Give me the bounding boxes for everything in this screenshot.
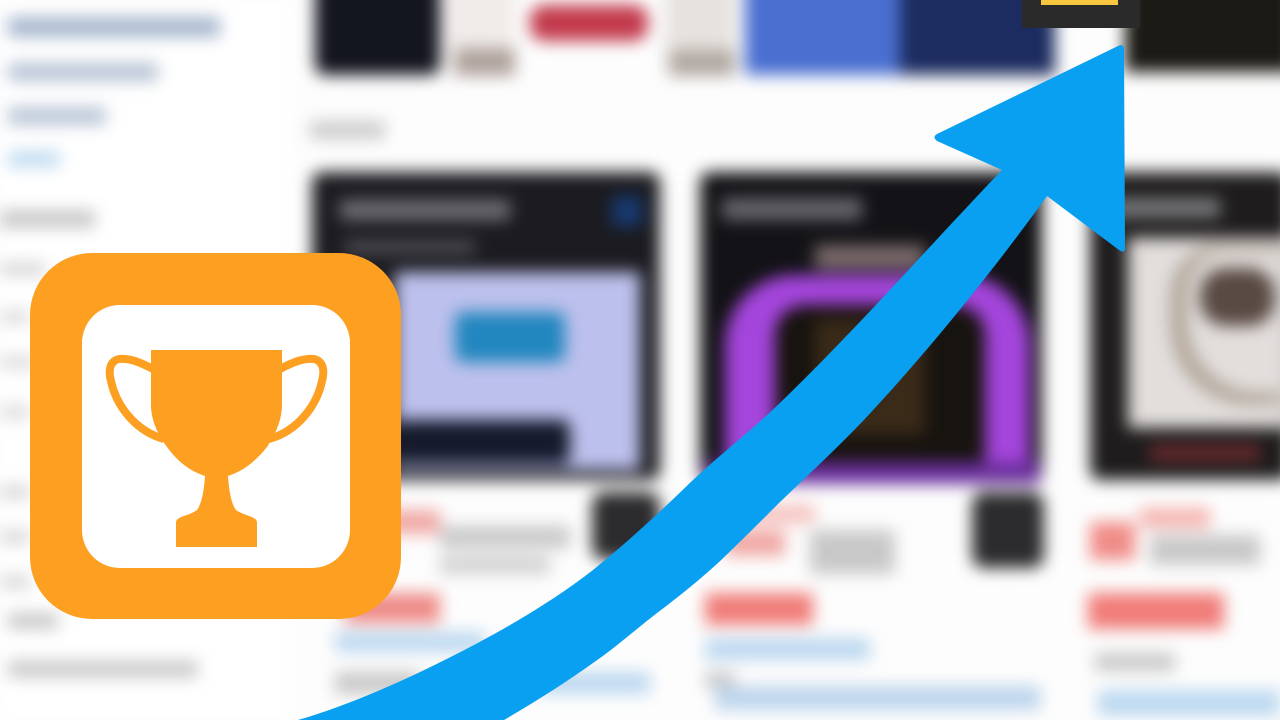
price tags and text lines — [370, 510, 440, 534]
top row of thumbnails — [315, 0, 440, 75]
yellow badge at top edge — [1022, 0, 1140, 28]
white rounded tile — [82, 305, 350, 568]
left sidebar — [0, 0, 290, 720]
yellow badge fill — [1041, 0, 1118, 5]
overlay buttons — [592, 492, 660, 560]
product card 2 — [700, 172, 1042, 482]
product card 1 — [312, 172, 660, 480]
product card 3 — [1090, 172, 1280, 480]
section label — [310, 121, 385, 139]
icon: orange rounded square — [30, 253, 401, 619]
